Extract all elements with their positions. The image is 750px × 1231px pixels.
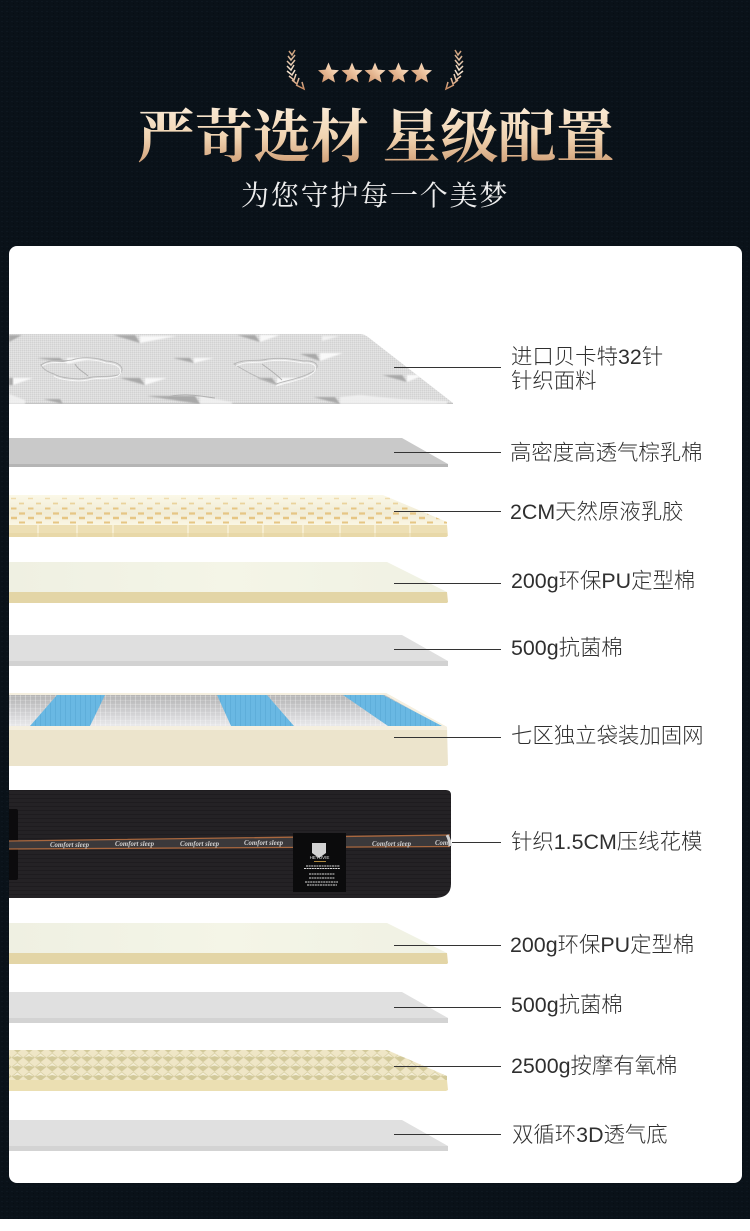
blue zone stripes [30,695,442,726]
band brand text: Comfort sleep [180,841,220,848]
band brand text: Comfort sleep [115,841,155,848]
leader line and label: antibacterial cotton lower: 500g抗菌棉 [511,993,623,1017]
layer: natural latex [9,495,448,537]
band brand text: Comfort sleep [372,841,412,848]
layer: palm latex foam [9,438,448,467]
leader line and label: mattress core: 针织1.5CM压线花模 [511,830,702,854]
woven band [9,835,450,849]
leader line and label: PU foam lower: 200g环保PU定型棉 [510,933,694,957]
leader line and label: natural latex: 2CM天然原液乳胶 [510,500,684,524]
leader line and label: antibacterial cotton upper: 500g抗菌棉 [511,636,623,660]
leader line and label: palm latex foam: 高密度高透气棕乳棉 [510,441,703,465]
layer: black mattress core [9,790,451,898]
icon: left laurel [287,50,304,89]
band brand text [50,840,451,849]
product label: HEYUVIE [310,855,329,860]
layer: 3D breathable base [9,1120,448,1151]
band brand text: Comfort sleep [244,840,284,847]
layer: massage foam [9,1050,448,1091]
title: 严苛选材 星级配置 [137,105,614,170]
subtitle: 为您守护每一个美梦 [241,180,509,212]
leader line and label: massage foam: 2500g按摩有氧棉 [511,1054,677,1078]
icon: right laurel [446,50,463,89]
layer: antibacterial cotton upper [9,635,448,666]
layer: knit fabric [9,334,455,404]
panel: white layer card [9,246,742,1183]
leader line and label: knit fabric: 进口贝卡特32针 [511,345,663,369]
leader line and label: knit fabric [394,345,663,393]
layer: antibacterial cotton lower [9,992,448,1023]
leader line and label: PU foam upper: 200g环保PU定型棉 [511,569,695,593]
layer: PU foam lower [9,923,448,964]
leader line and label: 3D breathable base: 双循环3D透气底 [512,1123,668,1147]
band brand text: Comfort sleep [50,842,90,849]
layer: PU foam upper [9,562,448,603]
header: rating emblem [287,50,463,89]
band brand text: Comf [435,840,451,847]
embossed flowers [41,358,317,398]
leader line and label: knit fabric: 针织面料 [511,369,597,393]
left tag [9,809,18,880]
product label [293,833,346,892]
leader line and label: pocket spring net: 七区独立袋装加固网 [511,724,704,748]
layer: pocket spring net [9,693,448,766]
icon: five stars [318,62,432,82]
